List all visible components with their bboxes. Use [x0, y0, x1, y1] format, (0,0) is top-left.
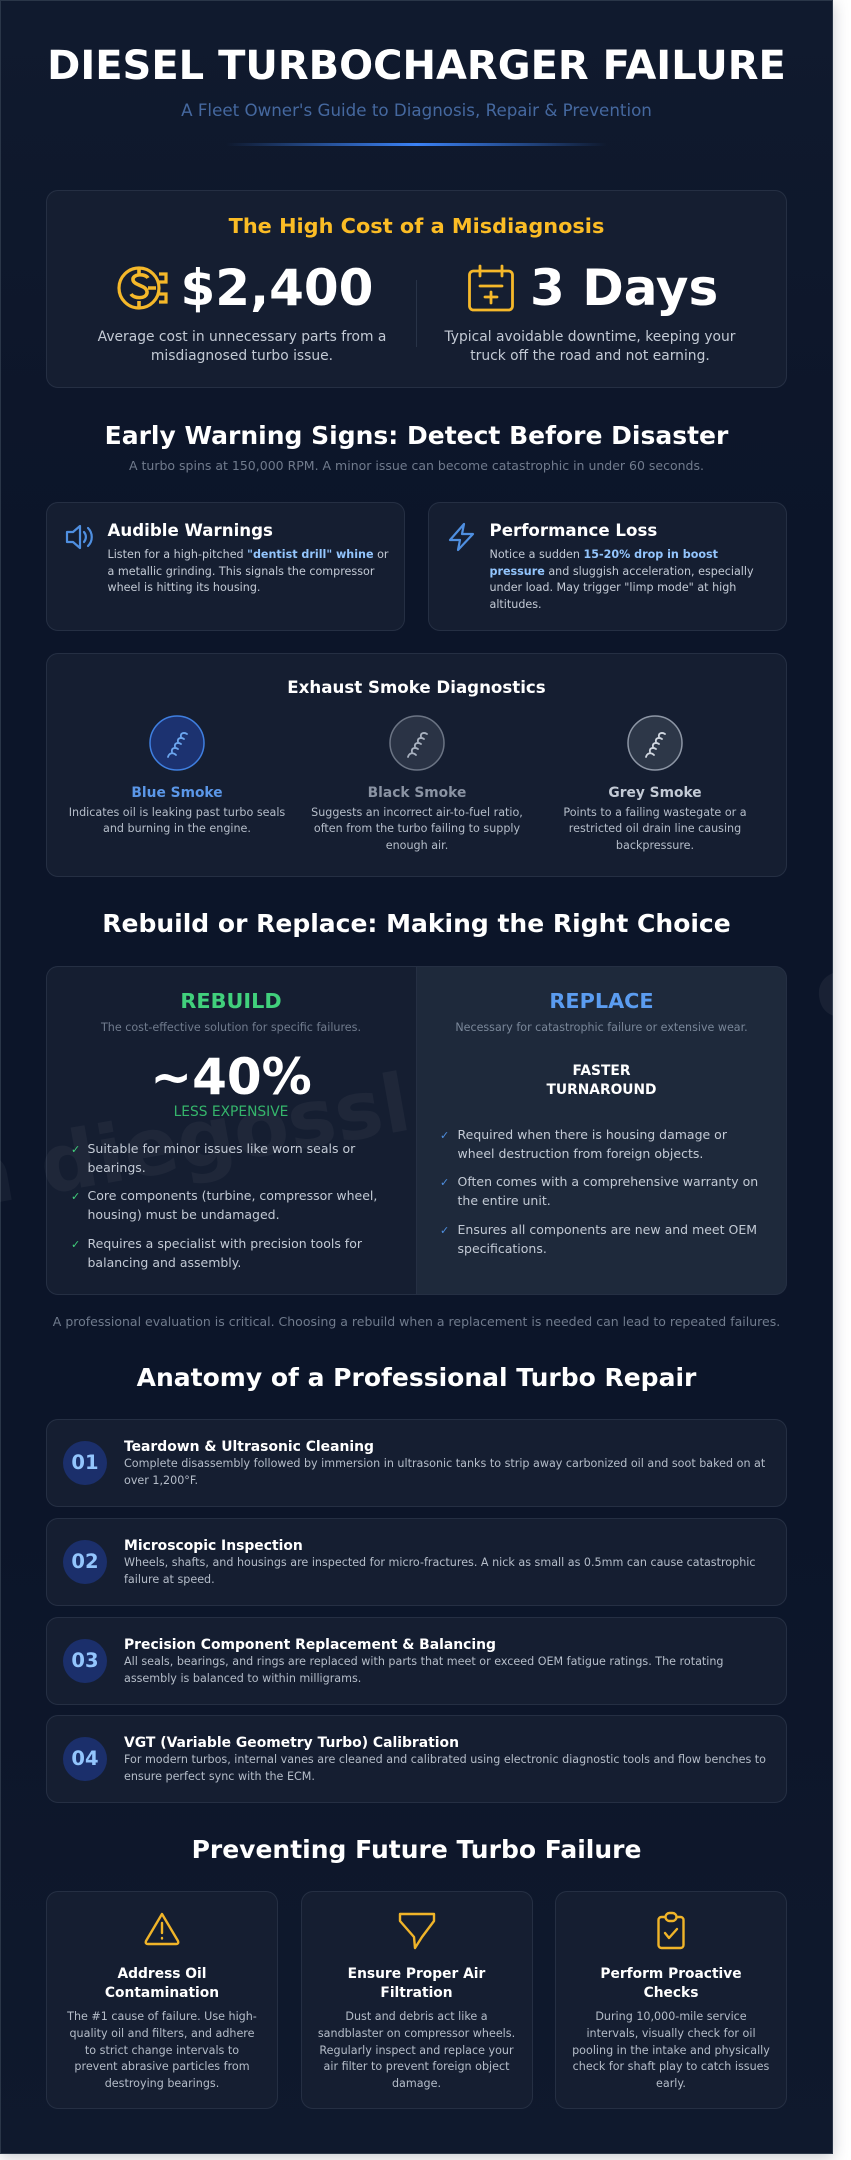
panel: proactive checks: [555, 1891, 787, 2109]
stat description: downtime: truck off the road and not earning.: [470, 348, 710, 364]
card title: Performance Loss: [490, 521, 657, 540]
step text: [124, 1556, 755, 1586]
card text: wheel is hitting its housing.: [108, 581, 260, 594]
card text: [108, 548, 388, 594]
card text: destroying bearings.: [105, 2077, 219, 2090]
heading: preventing failure: Preventing Future Turbo Failure: [192, 1835, 641, 1864]
rebuild stat: ~40%: [150, 1048, 312, 1106]
item: the entire unit.: [458, 1193, 551, 1208]
item: [458, 1174, 758, 1208]
step number: [63, 1540, 107, 1584]
step 1: [46, 1419, 787, 1507]
item: bearings.: [88, 1160, 146, 1175]
step title: Teardown & Ultrasonic Cleaning: [124, 1439, 374, 1455]
rebuild list: [71, 1140, 377, 1270]
vertical divider: [416, 280, 417, 347]
card title: Ensure Proper Air: [348, 1966, 485, 1982]
title divider: [226, 143, 607, 146]
item: Requires a specialist with precision tools for: [88, 1236, 362, 1250]
smoke text: blue: Indicates oil is leaking past turbo seals: [69, 806, 285, 818]
section intro: A turbo spins at 150,000 RPM. A minor issue can become catastrophic in under 60 seconds.: [129, 458, 704, 472]
item: balancing and assembly.: [88, 1255, 241, 1270]
step text: failure at speed.: [124, 1573, 215, 1586]
smoke title: black: Black Smoke: [368, 785, 466, 801]
step 2: [46, 1518, 787, 1606]
rebuild stat label: LESS EXPENSIVE: [174, 1104, 288, 1120]
card text: altitudes.: [490, 598, 542, 611]
item: Suitable for minor issues like worn seals or: [88, 1140, 355, 1156]
replace stat: [546, 1062, 657, 1098]
card text: to strict change intervals to: [85, 2044, 239, 2057]
step number: 03: [71, 1649, 99, 1672]
panel heading: The High Cost of a Misdiagnosis: [229, 214, 604, 238]
card text: a metallic grinding. This signals the compressor: [108, 564, 374, 578]
stat description: cost: Average cost in unnecessary parts from a: [98, 328, 386, 344]
icon: clipboard: [657, 1912, 685, 1950]
card text: [490, 548, 754, 611]
card text: quality oil and filters, and adhere: [69, 2027, 254, 2040]
item: [458, 1222, 757, 1256]
heading: rebuild or replace: Rebuild or Replace: Making the Right Choice: [102, 909, 731, 938]
replace subtitle: Necessary for catastrophic failure or extensive wear.: [455, 1021, 748, 1034]
item: Often comes with a comprehensive warranty on: [458, 1174, 758, 1189]
card text: [67, 2010, 257, 2090]
step text: All seals, bearings, and rings are replaced with parts that meet or exceed OEM fatigue ratings. The rotating: [124, 1655, 724, 1668]
replace title: REPLACE: [549, 989, 654, 1013]
item: specifications.: [458, 1241, 547, 1256]
icon: lightning: [448, 522, 474, 552]
subtitle: A Fleet Owner's Guide to Diagnosis, Repair & Prevention: [181, 100, 652, 120]
replace list: [440, 1126, 758, 1256]
card title: Contamination: [105, 1985, 219, 2001]
step number: 01: [71, 1451, 99, 1474]
step text: over 1,200°F.: [124, 1474, 198, 1487]
step title: Microscopic Inspection: [124, 1538, 303, 1554]
card text: Regularly inspect and replace your: [319, 2044, 514, 2057]
item: [458, 1126, 727, 1161]
card text: damage.: [392, 2077, 441, 2090]
card text: pooling in the intake and physically: [572, 2044, 770, 2057]
card title: [348, 1966, 486, 2001]
smoke title: grey: Grey Smoke: [608, 785, 702, 801]
item: Ensures all components are new and meet OEM: [458, 1222, 757, 1236]
icon: funnel: [398, 1912, 436, 1950]
step number: [63, 1737, 107, 1781]
panel heading: Exhaust Smoke Diagnostics: [287, 678, 546, 697]
replace stat: FASTER: [573, 1062, 630, 1078]
heading: anatomy of repair: Anatomy of a Professional Turbo Repair: [137, 1363, 696, 1392]
panel: cost of misdiagnosis: [46, 190, 787, 388]
stat: cost: $2,400: [180, 259, 373, 317]
card text: intervals, visually check for oil: [586, 2027, 756, 2040]
card text: sandblaster on compressor wheels.: [318, 2027, 515, 2040]
replace stat: TURNAROUND: [546, 1082, 657, 1098]
card title: [600, 1966, 742, 2001]
stat description: cost: misdiagnosed turbo issue.: [151, 348, 333, 364]
panel: performance loss: [428, 502, 787, 631]
stat description: cost: [98, 328, 386, 364]
panel: air filtration: [300, 1891, 532, 2109]
card text: check for shaft play to catch issues: [573, 2060, 769, 2073]
item: Required when there is housing damage or: [458, 1126, 727, 1142]
check: ✓: [71, 1190, 80, 1203]
step 4: [46, 1715, 787, 1803]
smoke title: blue: Blue Smoke: [131, 785, 223, 801]
card title: Checks: [644, 1985, 698, 2001]
heading: early warning signs: Early Warning Signs: Detect Before Disaster: [105, 421, 728, 450]
item: [88, 1236, 362, 1270]
card text: pressure and sluggish acceleration, especially: [490, 564, 754, 578]
card title: [105, 1966, 219, 2001]
icon: dollar gear: [117, 266, 168, 310]
card text: air filter to prevent foreign object: [324, 2060, 509, 2073]
icon: blue smoke: [149, 715, 205, 771]
panel: rebuild background: [46, 966, 417, 1295]
check: ✓: [71, 1142, 80, 1156]
step text: [124, 1753, 766, 1783]
icon: grey smoke: [627, 715, 683, 771]
icon: speaker: [66, 524, 93, 550]
card text: early.: [656, 2077, 686, 2090]
card text: [572, 2010, 770, 2090]
smoke text: grey: backpressure.: [616, 839, 694, 852]
step title: VGT (Variable Geometry Turbo) Calibration: [124, 1735, 459, 1751]
step text: Complete disassembly followed by immersion in ultrasonic tanks to strip away carbonized oil and soot baked on at: [124, 1457, 765, 1470]
panel: exhaust smoke diagnostics: [46, 653, 787, 877]
step number: 02: [71, 1550, 99, 1573]
card text: The #1 cause of failure. Use high-: [67, 2010, 257, 2023]
stat description: downtime: [444, 328, 736, 364]
step text: For modern turbos, internal vanes are cleaned and calibrated using electronic diagnostic tools and flow benches to: [124, 1753, 766, 1766]
card title: Audible Warnings: [108, 521, 273, 540]
card text: prevent abrasive particles from: [74, 2060, 250, 2073]
step title: Precision Component Replacement & Balancing: [124, 1637, 496, 1653]
step text: ensure perfect sync with the ECM.: [124, 1770, 315, 1783]
check: ✓: [71, 1238, 80, 1250]
step number: 04: [71, 1747, 99, 1770]
step text: assembly is balanced to within milligrams.: [124, 1672, 361, 1685]
step number: [63, 1639, 107, 1683]
panel: audible warnings: [46, 502, 405, 631]
card title: Address Oil: [117, 1966, 206, 1982]
title: DIESEL TURBOCHARGER FAILURE: [47, 43, 786, 89]
step text: [124, 1655, 724, 1685]
rebuild column: [71, 989, 377, 1270]
item: [88, 1140, 356, 1175]
icon: warning triangle: [144, 1912, 180, 1946]
icon: black smoke: [389, 715, 445, 771]
panel: oil contamination: [46, 1891, 278, 2109]
smoke text: blue: and burning in the engine.: [103, 822, 251, 835]
stat description: downtime: Typical avoidable downtime, keeping your: [444, 328, 736, 344]
check: ✓: [440, 1176, 449, 1189]
smoke text: black: Suggests an incorrect air-to-fuel ratio,: [311, 806, 523, 818]
stat: downtime: 3 Days: [530, 259, 718, 317]
card text: Listen for a high-pitched "dentist drill" whine or: [108, 548, 388, 561]
smoke text: grey: [563, 806, 747, 852]
smoke text: black: enough air.: [386, 839, 448, 852]
card title: Perform Proactive: [600, 1966, 742, 1982]
card title: Filtration: [380, 1985, 453, 2001]
smoke text: blue: [69, 806, 285, 835]
card text: [318, 2010, 515, 2090]
step text: Wheels, shafts, and housings are inspected for micro-fractures. A nick as small as 0.5mm can cause catastrophic: [124, 1556, 755, 1569]
footnote: A professional evaluation is critical. Choosing a rebuild when a replacement is needed can lead to repeated failures.: [53, 1314, 780, 1328]
smoke text: black: [311, 806, 523, 852]
item: [88, 1188, 377, 1222]
card text: under load. May trigger "limp mode" at high: [490, 581, 736, 594]
card text: During 10,000-mile service: [595, 2010, 747, 2023]
step text: [124, 1457, 765, 1487]
check: ✓: [440, 1224, 449, 1236]
rebuild subtitle: The cost-effective solution for specific failures.: [101, 1021, 361, 1034]
step 3: [46, 1617, 787, 1705]
card text: Dust and debris act like a: [345, 2010, 488, 2023]
card text: Notice a sudden 15-20% drop in boost: [490, 548, 718, 561]
rebuild title: REBUILD: [180, 989, 282, 1013]
icon: calendar: [468, 264, 514, 312]
smoke text: grey: restricted oil drain line causing: [569, 822, 741, 835]
replace column: [440, 989, 758, 1256]
smoke text: grey: Points to a failing wastegate or a: [563, 806, 747, 818]
item: housing) must be undamaged.: [88, 1207, 280, 1222]
smoke text: black: often from the turbo failing to supply: [314, 822, 520, 835]
check: ✓: [440, 1128, 449, 1142]
item: Core components (turbine, compressor wheel,: [88, 1188, 377, 1203]
item: wheel destruction from foreign objects.: [458, 1146, 703, 1161]
panel: replace background: [416, 966, 787, 1295]
step number: [63, 1441, 107, 1485]
